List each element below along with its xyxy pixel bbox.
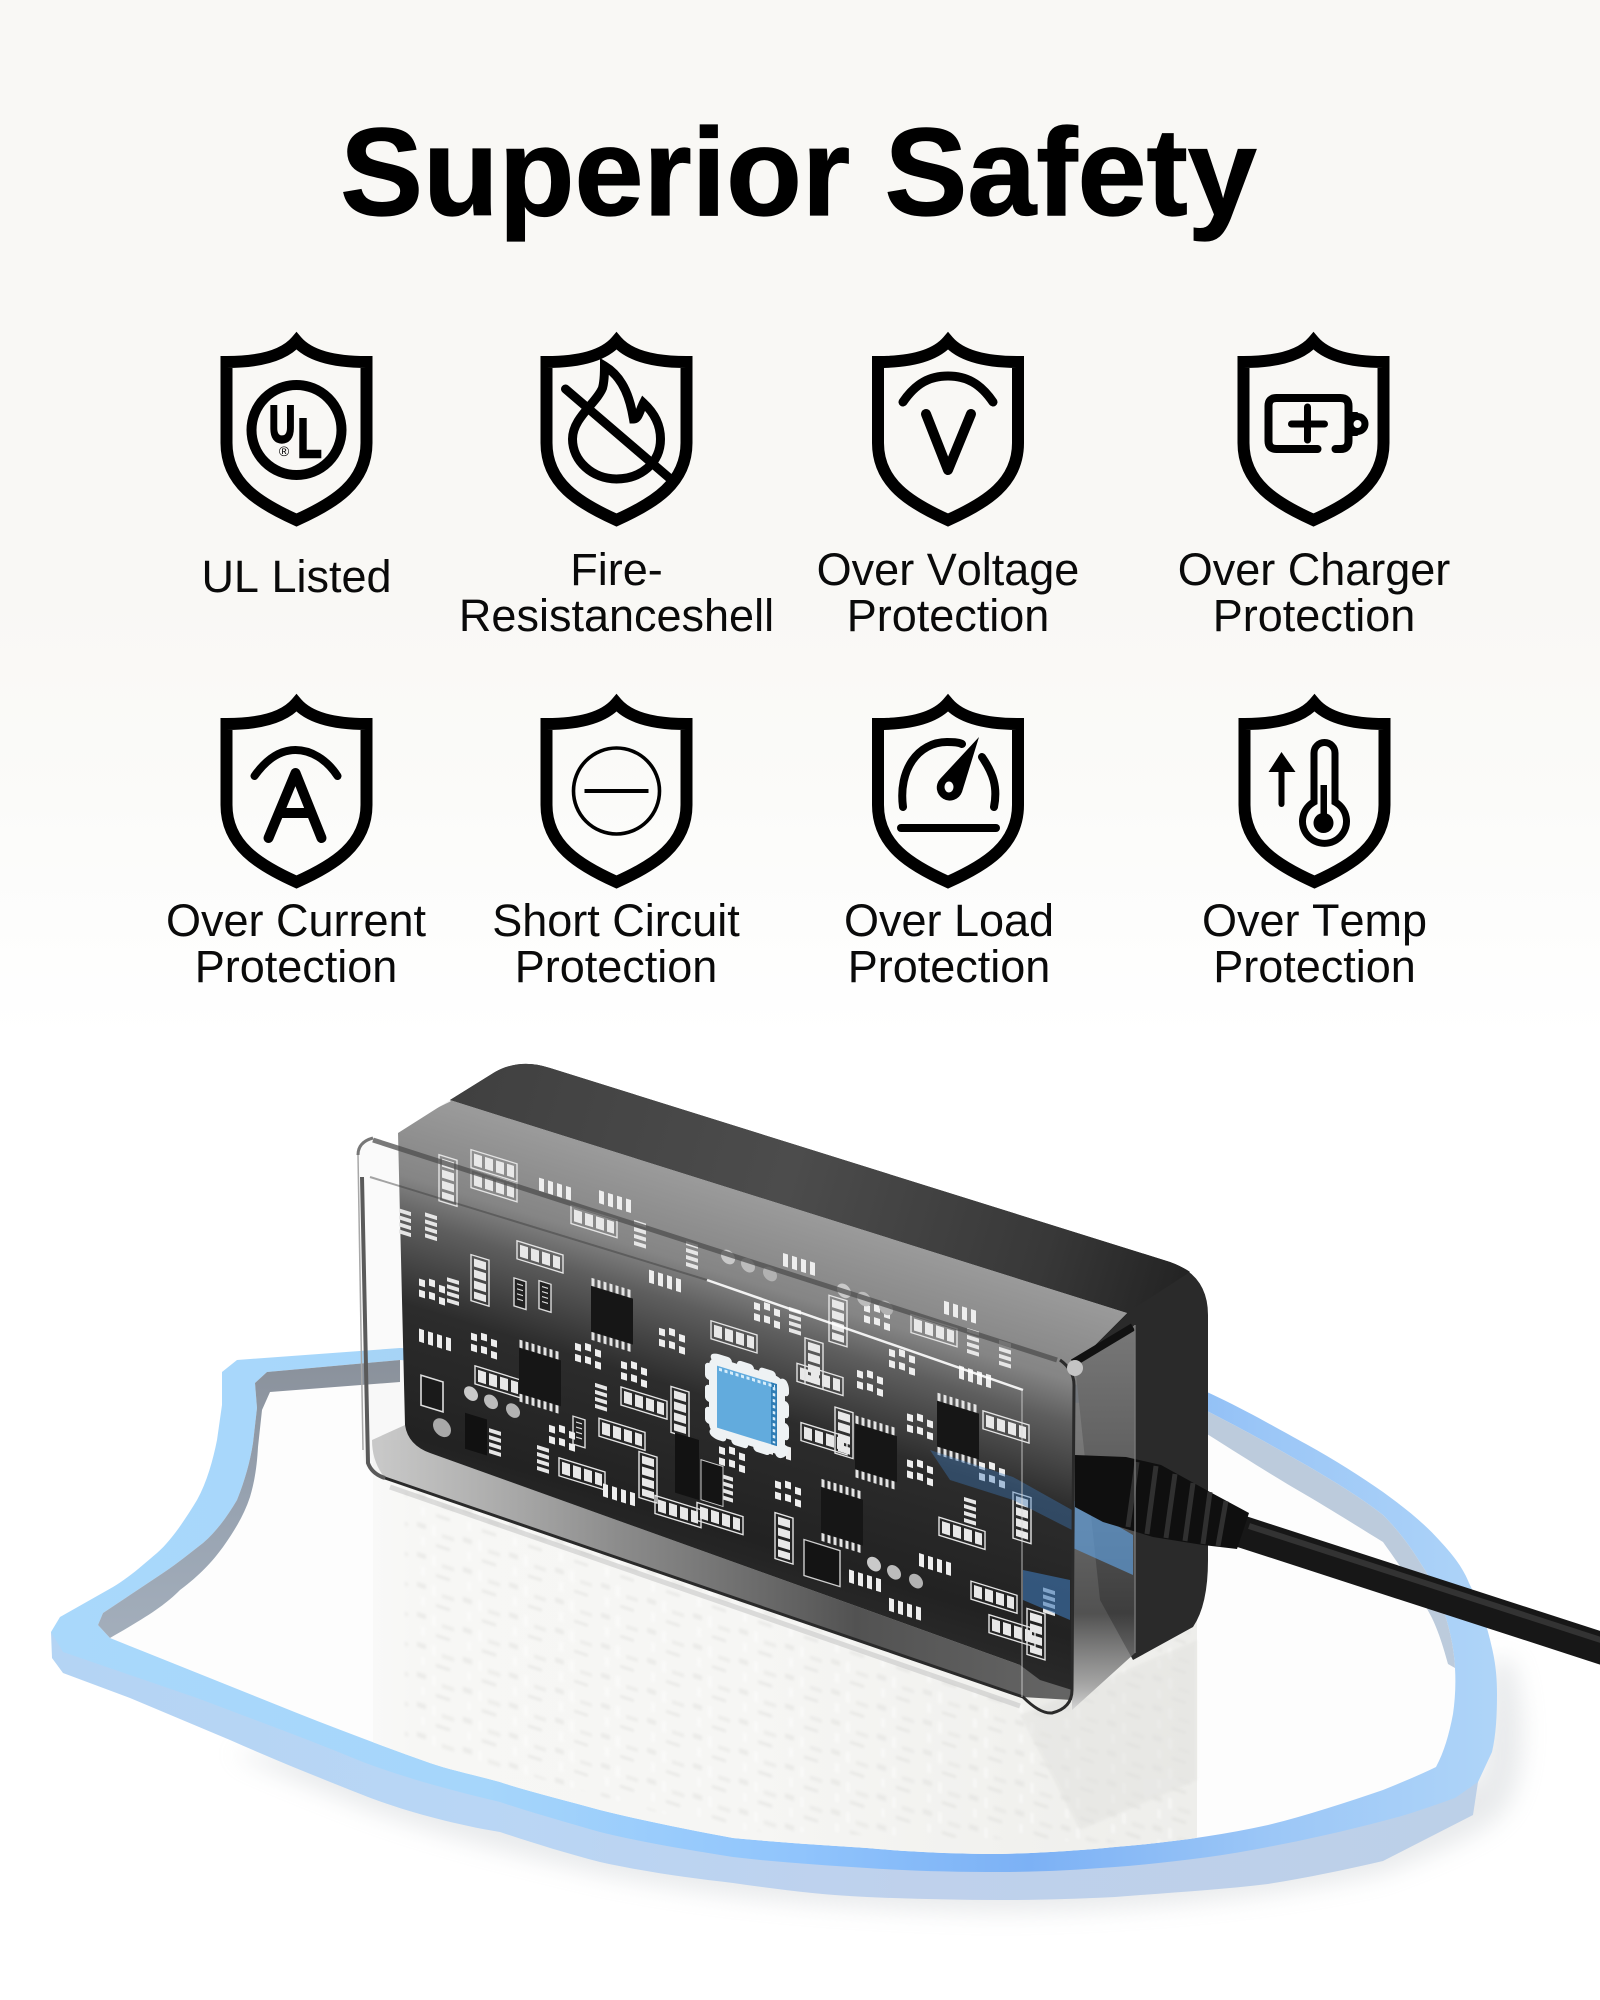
platform floor <box>98 1360 1455 1854</box>
label: Short Circuit <box>492 895 740 946</box>
feature: UL Listed <box>201 341 392 602</box>
device reflection <box>373 1490 1197 1854</box>
clear front case <box>358 1138 1075 1713</box>
clear side wall <box>1072 1325 1135 1710</box>
feature: Short Circuit Protection <box>492 703 740 992</box>
feature: Over Current Protection <box>166 703 427 992</box>
icon: thermometer shield <box>1244 703 1384 882</box>
platform rim top <box>51 1348 1497 1872</box>
platform inner wall: right <box>1207 1411 1455 1668</box>
platform shadow <box>230 1660 1523 1912</box>
label: Over Current <box>166 895 427 946</box>
icon: crossed flame shield <box>546 341 686 520</box>
cable <box>1075 1455 1600 1651</box>
icon: battery shield <box>1244 341 1384 520</box>
platform inner wall: left <box>98 1360 400 1638</box>
icon: UL shield <box>226 341 366 520</box>
icon: short circuit shield <box>546 703 686 882</box>
feature: Over Load Protection <box>844 703 1054 992</box>
label: Protection <box>1213 590 1415 641</box>
central blue chip <box>709 1355 785 1457</box>
label: Over Temp <box>1202 895 1427 946</box>
label: UL Listed <box>201 551 392 602</box>
icon: current shield <box>226 703 366 882</box>
label: Protection <box>1213 941 1416 992</box>
blue reflections on case <box>930 1450 1072 1620</box>
label: Protection <box>848 941 1050 992</box>
label: Resistanceshell <box>459 590 774 641</box>
adapter black body <box>450 1064 1208 1660</box>
adapter top face <box>450 1064 1190 1313</box>
title: Superior Safety <box>340 104 1257 242</box>
strain relief <box>1075 1455 1249 1549</box>
clear case outline <box>358 1100 1135 1713</box>
icon: voltage shield <box>878 341 1018 520</box>
circuit board panel <box>398 1100 1127 1690</box>
feature: Fire-Resistance shell <box>459 341 774 641</box>
label: Protection <box>195 941 397 992</box>
feature: Over Voltage Protection <box>817 341 1079 641</box>
label: Over Load <box>844 895 1054 946</box>
feature: Over Temp Protection <box>1202 703 1427 992</box>
blue reflection on side wall <box>1073 1500 1133 1575</box>
label: Over Voltage <box>817 544 1079 595</box>
label: Over Charger <box>1178 544 1450 595</box>
label: Protection <box>847 590 1049 641</box>
power adapter <box>358 1064 1600 1713</box>
platform side wall <box>51 1632 1478 1900</box>
icon: UL shield: ® <box>279 443 290 459</box>
shield-shaped platform ring <box>51 1348 1523 1912</box>
label: Fire- <box>570 544 663 595</box>
icon: gauge shield <box>878 703 1018 882</box>
label: Protection <box>515 941 717 992</box>
icon: UL shield: L <box>298 409 322 470</box>
lower clear band of case <box>372 1425 1072 1700</box>
icon: UL shield: U <box>269 394 295 454</box>
feature: Over Charger Protection <box>1178 341 1450 641</box>
circuit board components <box>399 1127 1055 1663</box>
